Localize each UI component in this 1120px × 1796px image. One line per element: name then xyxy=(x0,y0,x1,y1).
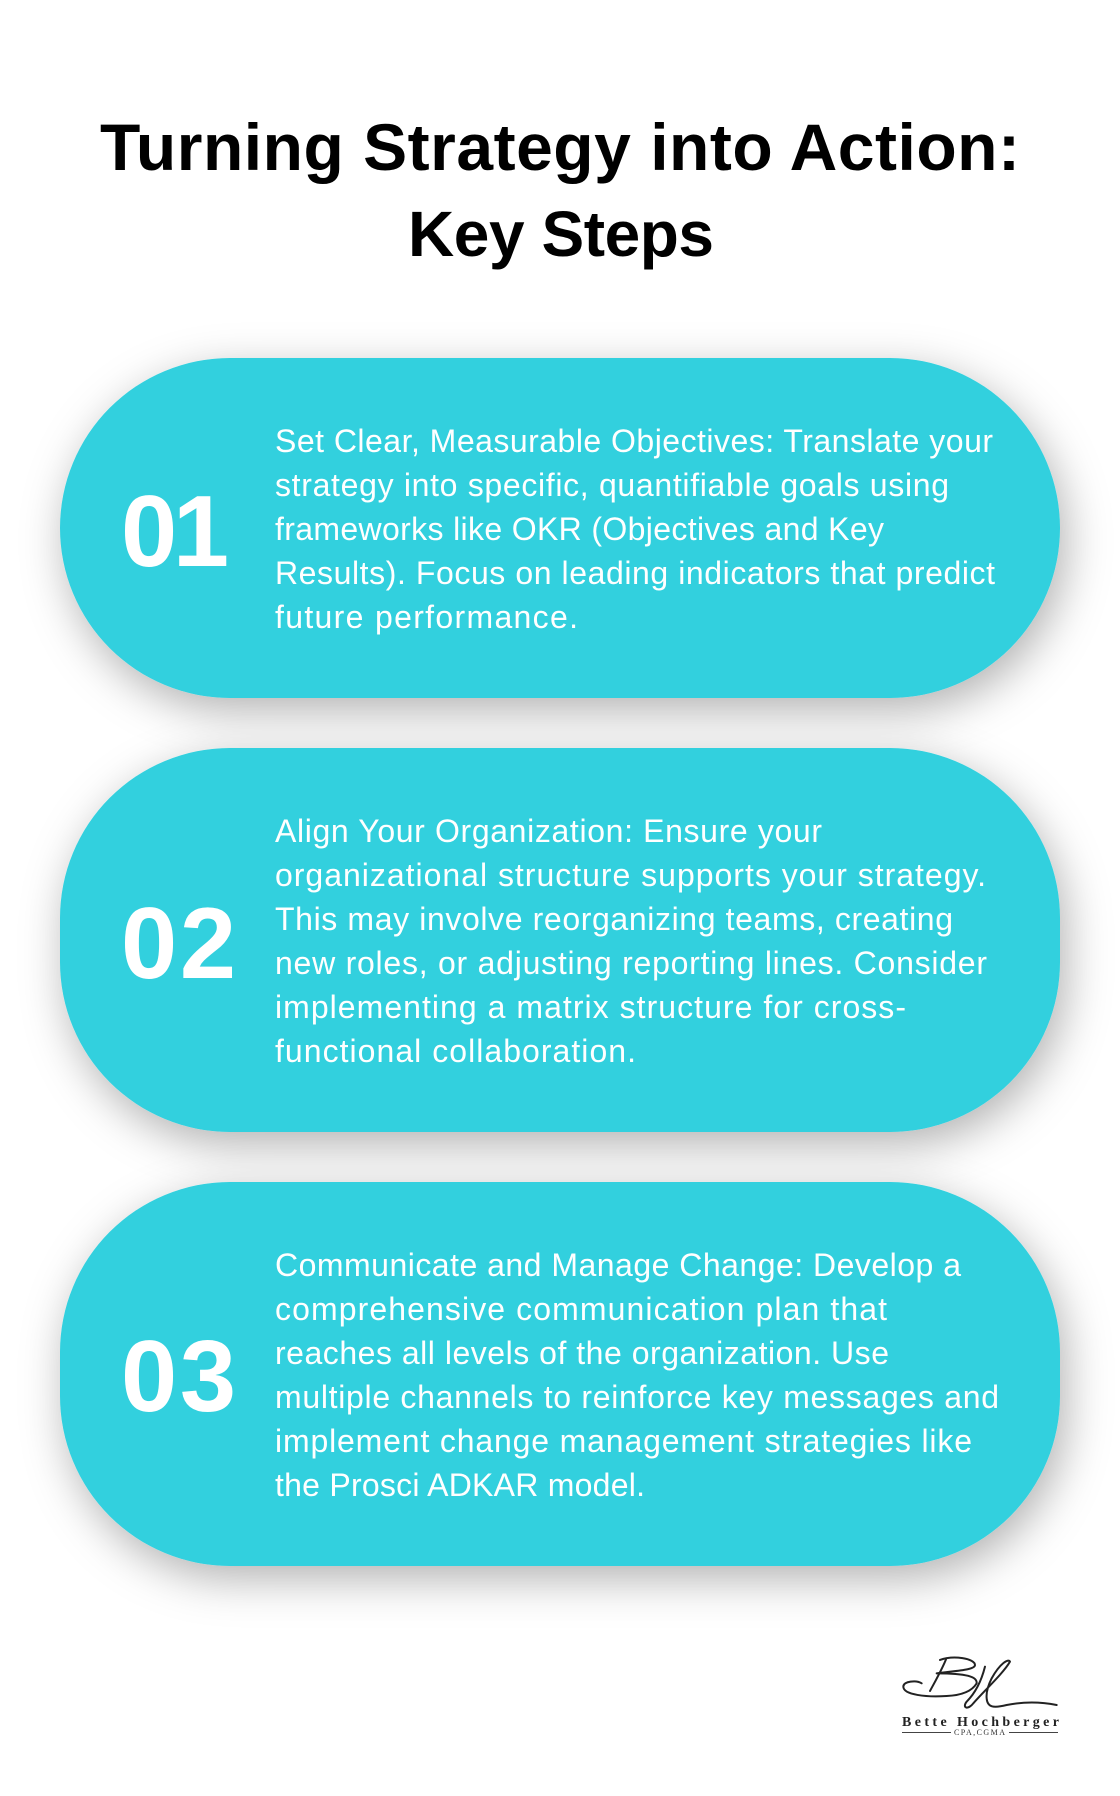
text block 02 xyxy=(275,813,987,1069)
text block 03: comprehensive communication plan that xyxy=(275,1291,887,1327)
title xyxy=(100,110,1020,270)
text block 02: Align Your Organization: Ensure your xyxy=(275,813,822,849)
text block 02: implementing a matrix structure for cross- xyxy=(275,989,906,1025)
text block 03: Communicate and Manage Change: Develop a xyxy=(275,1247,961,1283)
text block 01: Results). Focus on leading indicators that predict xyxy=(275,555,995,591)
number 02: 02 xyxy=(121,888,236,1000)
number 01: 01 xyxy=(121,476,229,588)
panel: step 03 xyxy=(60,1182,1060,1566)
text block 02: functional collaboration. xyxy=(275,1033,636,1069)
number 03: 03 xyxy=(121,1321,236,1433)
text block 01: Set Clear, Measurable Objectives: Translate your xyxy=(275,423,993,459)
text block 03 xyxy=(275,1247,999,1503)
pill background 01 xyxy=(60,358,1060,698)
text block 03: multiple channels to reinforce key messages and xyxy=(275,1379,999,1415)
text block 01: future performance. xyxy=(275,599,578,635)
text block 02: new roles, or adjusting reporting lines. Consider xyxy=(275,945,987,981)
text block 01: strategy into specific, quantifiable goals using xyxy=(275,467,949,503)
text block 01: frameworks like OKR (Objectives and Key xyxy=(275,511,884,547)
logo: Bette Hochberger xyxy=(902,1658,1059,1737)
text block 03: the Prosci ADKAR model. xyxy=(275,1467,645,1503)
icon: signature flourish xyxy=(903,1658,1057,1708)
title: Key Steps xyxy=(408,198,714,270)
pill background 02 xyxy=(60,748,1060,1132)
logo credentials: CPA,CGMA xyxy=(954,1728,1005,1737)
text block 03: reaches all levels of the organization. Use xyxy=(275,1335,889,1371)
text block 03: implement change management strategies like xyxy=(275,1423,972,1459)
panel: step 01 xyxy=(60,358,1060,698)
pill background 03 xyxy=(60,1182,1060,1566)
logo name: Bette Hochberger xyxy=(902,1715,1059,1730)
text block 02: organizational structure supports your strategy. xyxy=(275,857,986,893)
title: Turning Strategy into Action: xyxy=(100,110,1020,184)
text block 02: This may involve reorganizing teams, creating xyxy=(275,901,953,937)
panel: step 02 xyxy=(60,748,1060,1132)
text block 01 xyxy=(275,423,995,635)
